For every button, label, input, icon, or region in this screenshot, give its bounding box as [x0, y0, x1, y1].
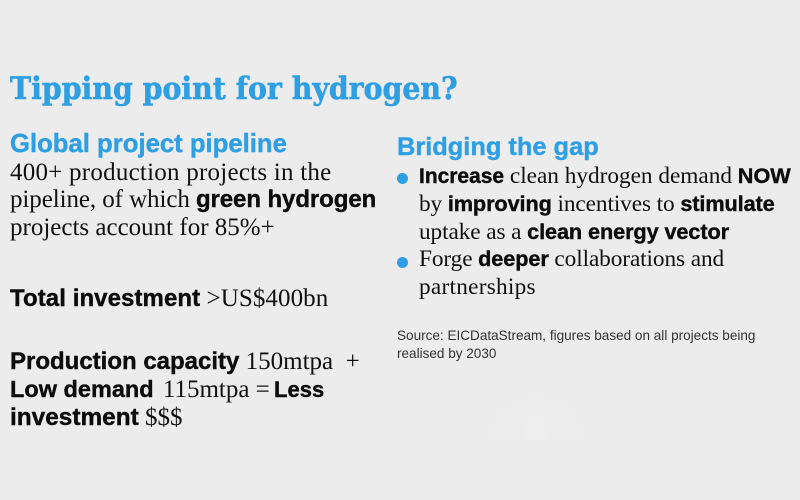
heading: global project pipeline: Global project pipeline	[10, 130, 287, 158]
text block: increase demand: by improving incentives to stimulate	[419, 191, 775, 217]
text block: source: Source: EICDataStream, figures based on all projects being	[397, 328, 755, 343]
text block: pipeline description: projects account for 85%+	[10, 214, 275, 241]
text block: pipeline description	[10, 159, 376, 241]
text block: capacity and demand: Production capacity 150mtpa +	[10, 348, 360, 374]
text block: capacity and demand	[10, 348, 360, 430]
bullet 1	[397, 163, 791, 244]
text block: pipeline description: 400+ production projects in the	[10, 159, 331, 186]
text block: collaborations	[419, 246, 724, 300]
bullet 2	[397, 246, 724, 300]
text block: collaborations: partnerships	[419, 274, 536, 300]
text block: pipeline description: pipeline, of which green hydrogen	[10, 186, 376, 213]
icon: bullet dot	[397, 173, 408, 184]
title: Tipping point for hydrogen?	[10, 71, 458, 107]
text block: increase demand	[419, 163, 791, 244]
icon: faint watermark logo	[485, 390, 585, 445]
text block: increase demand: uptake as a clean energy vector	[419, 218, 729, 244]
text block: increase demand: Increase clean hydrogen demand NOW	[419, 163, 791, 189]
text block: total investment: Total investment >US$400bn	[10, 285, 328, 312]
text block: capacity and demand: Low demand 115mtpa = Less	[10, 376, 324, 402]
text block: source	[397, 328, 755, 361]
heading: bridging the gap: Bridging the gap	[397, 133, 599, 161]
panel: global project pipeline	[10, 130, 376, 430]
text block: collaborations: Forge deeper collaborations and	[419, 246, 724, 272]
icon: bullet dot	[397, 256, 408, 268]
text block: source: realised by 2030	[397, 346, 496, 360]
panel: bridging the gap	[397, 133, 791, 361]
text block: capacity and demand: investment $$$	[10, 404, 183, 430]
